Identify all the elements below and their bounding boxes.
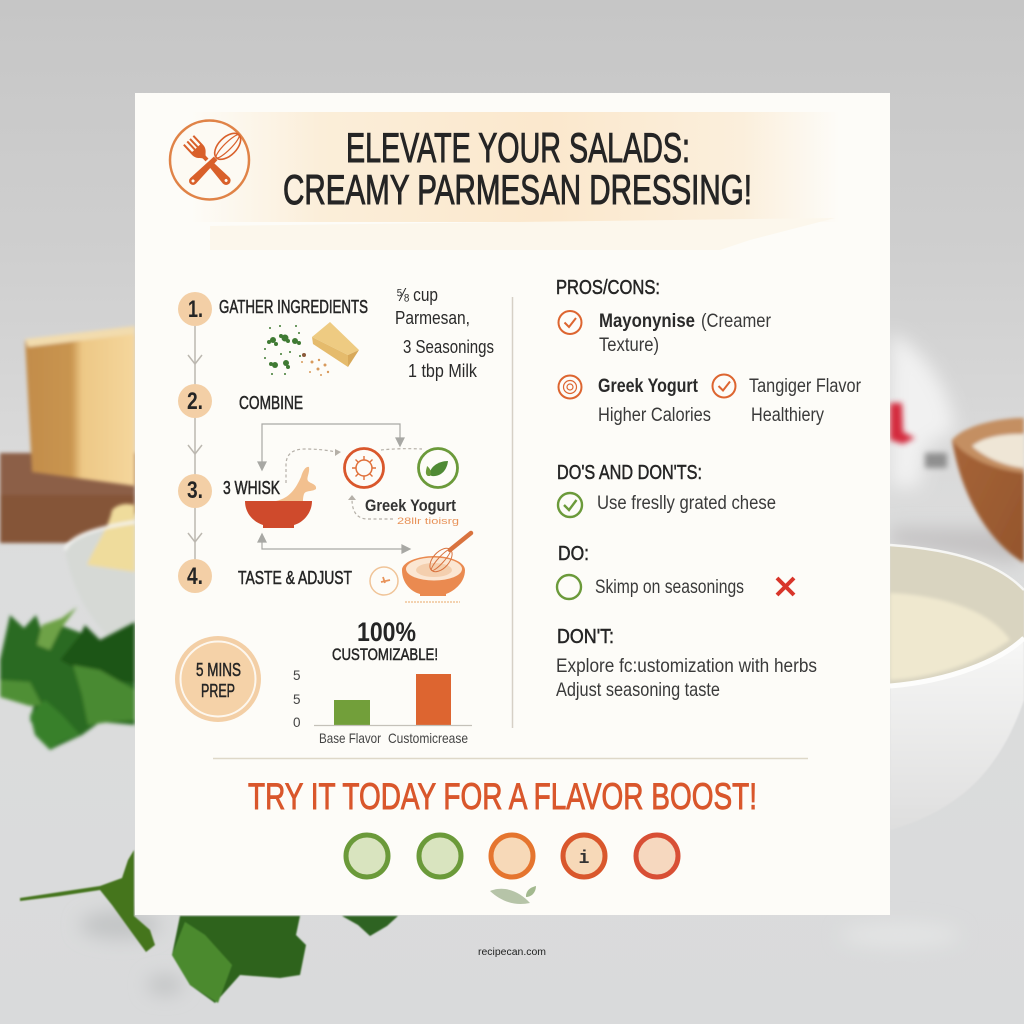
- text: do tip: Use freslly grated chese: [597, 493, 776, 514]
- source credit: recipecan.com: [478, 947, 546, 958]
- step 4 heading: TASTE & ADJUST: [238, 568, 352, 588]
- icon: timer: [370, 567, 398, 595]
- background: board: [0, 453, 135, 543]
- text: mayonnaise pro: Texture): [599, 335, 659, 356]
- bar: base flavor: [334, 700, 370, 725]
- bar chart: Customicrease: [388, 730, 468, 746]
- callout: 5 mins prep: 5 MINS: [196, 660, 241, 680]
- text: don't tips: Explore fc:ustomization with herbs: [556, 655, 817, 677]
- callout: 100% customizable: 100%: [357, 617, 416, 647]
- bar chart: 0: [293, 715, 301, 730]
- call to action: TRY IT TODAY FOR A FLAVOR BOOST!: [248, 776, 757, 817]
- icon: parmesan wedge: [312, 322, 359, 367]
- step 2 heading: COMBINE: [239, 393, 303, 413]
- bar chart: 5: [293, 692, 301, 707]
- icon: swirl: [558, 376, 582, 398]
- heading: do: DO:: [558, 543, 589, 565]
- callout: 5 mins prep: PREP: [201, 681, 235, 701]
- ingredient list: Parmesan,: [395, 307, 470, 328]
- icon: red cross: [777, 578, 794, 595]
- text: don't tips: [556, 655, 817, 701]
- step 4 badge: 4.: [187, 563, 203, 590]
- title: CREAMY PARMESAN DRESSING!: [283, 166, 752, 213]
- ingredient list: [395, 284, 494, 381]
- bar chart: Base Flavor: [319, 730, 381, 746]
- background: wooden bowl: [952, 418, 1024, 563]
- whisk: [184, 129, 245, 190]
- icon row: i: [579, 849, 590, 869]
- label: greek yogurt: Greek Yogurt: [365, 496, 456, 515]
- process connector arrows: [258, 424, 422, 553]
- text: skimp tip: Skimp on seasonings: [595, 577, 744, 598]
- step 3 badge: [178, 474, 212, 508]
- bar chart: 5: [293, 668, 301, 683]
- icon row: [346, 835, 678, 877]
- background: dressing bowl: [890, 545, 1024, 830]
- bar: customicrease: [416, 674, 451, 725]
- bar chart: [293, 668, 472, 746]
- label: greek yogurt: [365, 496, 459, 526]
- panel: main card: [135, 93, 890, 915]
- panel: steps: [178, 284, 494, 602]
- text: greek yogurt con: Higher Calories: [598, 405, 711, 426]
- title: [283, 124, 752, 213]
- icon: herbs and spices: [264, 325, 329, 376]
- panel: pros and cons: [556, 277, 862, 426]
- background: small bowl: [65, 504, 135, 640]
- background: parsley left: [0, 607, 135, 750]
- step 3 heading: 3 WHISK: [223, 478, 280, 498]
- callout: 5 mins prep: [175, 636, 261, 722]
- ingredient list: 3 Seasonings: [403, 336, 494, 357]
- icon: sun circle: [344, 448, 384, 488]
- panel: do's and don'ts: [556, 462, 817, 701]
- heading: don't: DON'T:: [557, 626, 614, 648]
- text: greek yogurt con: [598, 376, 711, 426]
- fork: [183, 135, 235, 189]
- ingredient list: 1 tbp Milk: [408, 360, 478, 381]
- step 1 badge: [178, 292, 212, 326]
- ingredient list: ⅝ cup: [396, 284, 438, 305]
- icon: leaf circle: [418, 448, 458, 488]
- icon: fork and whisk: [170, 120, 249, 200]
- text: mayonnaise pro: Mayonynise: [599, 311, 695, 332]
- step 2 badge: [178, 384, 212, 418]
- background: white cloth: [890, 333, 1020, 565]
- callout: 100% customizable: CUSTOMIZABLE!: [332, 645, 438, 664]
- step 2 badge: 2.: [187, 388, 203, 415]
- label: greek yogurt: 28llr tioisrg: [397, 516, 459, 526]
- heading: pros/cons: PROS/CONS:: [556, 277, 660, 299]
- icon: orange check: [558, 311, 582, 334]
- text: tangier flavor: [749, 376, 862, 426]
- text: tangier flavor: Tangiger Flavor: [749, 376, 862, 397]
- step timeline: [188, 326, 202, 560]
- text: tangier flavor: Healthiery: [751, 405, 824, 426]
- icon: whisk bowl: [402, 533, 471, 602]
- icon: green circle: [557, 575, 581, 599]
- icon: leaf logo: [490, 886, 536, 904]
- text: greek yogurt con: Greek Yogurt: [598, 376, 699, 397]
- title: ELEVATE YOUR SALADS:: [346, 124, 690, 171]
- heading: do's and don'ts: DO'S AND DON'TS:: [557, 462, 702, 484]
- background: parsley bottom: [20, 850, 398, 1003]
- header banner: [190, 112, 840, 250]
- step 3 badge: 3.: [187, 477, 203, 504]
- text: mayonnaise pro: [599, 311, 772, 356]
- text: mayonnaise pro: (Creamer: [701, 311, 772, 332]
- step 1 badge: 1.: [188, 296, 203, 323]
- step 4 badge: [178, 559, 212, 593]
- callout: 100% customizable: [332, 617, 438, 664]
- icon: bowl with splash: [245, 467, 316, 528]
- step 1 heading: GATHER INGREDIENTS: [219, 297, 368, 317]
- icon: orange check: [712, 374, 736, 398]
- text: don't tips: Adjust seasoning taste: [556, 679, 720, 701]
- icon: green check: [558, 493, 582, 517]
- background: cheese block: [25, 326, 135, 486]
